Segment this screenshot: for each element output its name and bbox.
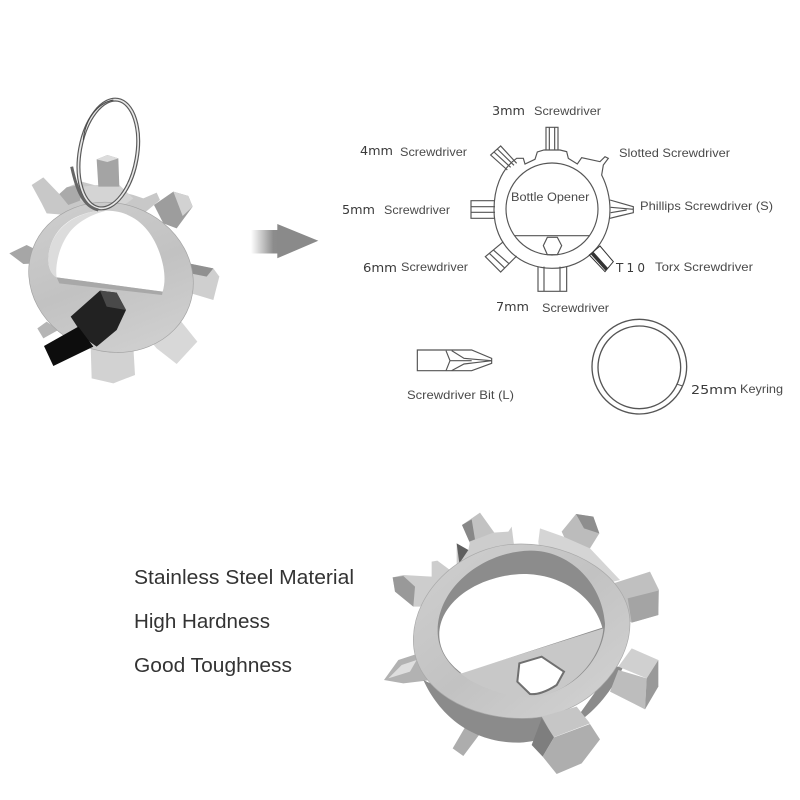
lower hex tooth: [532, 707, 600, 774]
label: 3mm: 3mm: [492, 104, 525, 118]
text: high hardness: High Hardness: [134, 611, 270, 633]
inner opening wall: [438, 551, 605, 696]
label: 6mm screwdriver: Screwdriver: [401, 260, 468, 274]
teeth: [9, 155, 219, 383]
diagram: screwdriver bit: [417, 350, 492, 371]
lower right tooth: [610, 648, 658, 709]
inner wall highlight: [48, 211, 107, 277]
photo: tool close-up: [384, 513, 659, 774]
arrow: [251, 224, 318, 258]
7mm tooth: [538, 267, 567, 291]
black screwdriver bit: [44, 291, 126, 366]
feature list: [134, 567, 354, 677]
label: 3mm screwdriver: Screwdriver: [534, 104, 601, 118]
diagram: tool schematic: [471, 127, 633, 291]
photo: tool with keyring and black bit: [7, 95, 219, 383]
label: screwdriver bit: Screwdriver Bit (L): [407, 388, 514, 402]
T10 tooth: [589, 246, 613, 272]
outer ring and hole: [494, 150, 610, 268]
label: T10: T10: [615, 261, 645, 275]
hexagon opening: [517, 657, 564, 694]
label: 7mm: 7mm: [496, 300, 529, 314]
5mm tooth: [471, 201, 495, 218]
lower plate: [460, 628, 603, 697]
label: 25mm: 25mm: [691, 383, 737, 397]
label: 7mm screwdriver: Screwdriver: [542, 301, 609, 315]
label: 4mm: 4mm: [360, 144, 393, 158]
white bottle opening: [48, 211, 165, 292]
label: phillips screwdriver: Phillips Screwdriver (S): [640, 199, 773, 213]
label: 5mm screwdriver: Screwdriver: [384, 203, 450, 217]
label: slotted screwdriver: Slotted Screwdriver: [619, 146, 730, 160]
lower plate: [57, 277, 163, 295]
keyring: [71, 95, 146, 213]
teeth: [384, 513, 659, 756]
ring body: [413, 544, 630, 718]
phillips tooth: [610, 200, 633, 218]
text: good toughness: Good Toughness: [134, 655, 292, 677]
text: stainless steel material: Stainless Steel Material: [134, 567, 354, 589]
bottle opener label: Bottle Opener: [511, 190, 589, 204]
label: 6mm: 6mm: [363, 261, 397, 275]
underside shadow: [423, 667, 623, 743]
label: keyring: Keyring: [740, 382, 783, 396]
label: 5mm: 5mm: [342, 203, 375, 217]
ring body: [7, 179, 215, 375]
labels: [342, 104, 783, 402]
label: 4mm screwdriver: Screwdriver: [400, 145, 467, 159]
4mm tooth: [491, 146, 517, 170]
diagram: 25mm keyring: [592, 319, 687, 414]
3mm tooth: [546, 127, 558, 150]
label: torx screwdriver: Torx Screwdriver: [655, 260, 753, 274]
6mm tooth: [485, 242, 517, 272]
white bottle opening: [439, 574, 602, 673]
